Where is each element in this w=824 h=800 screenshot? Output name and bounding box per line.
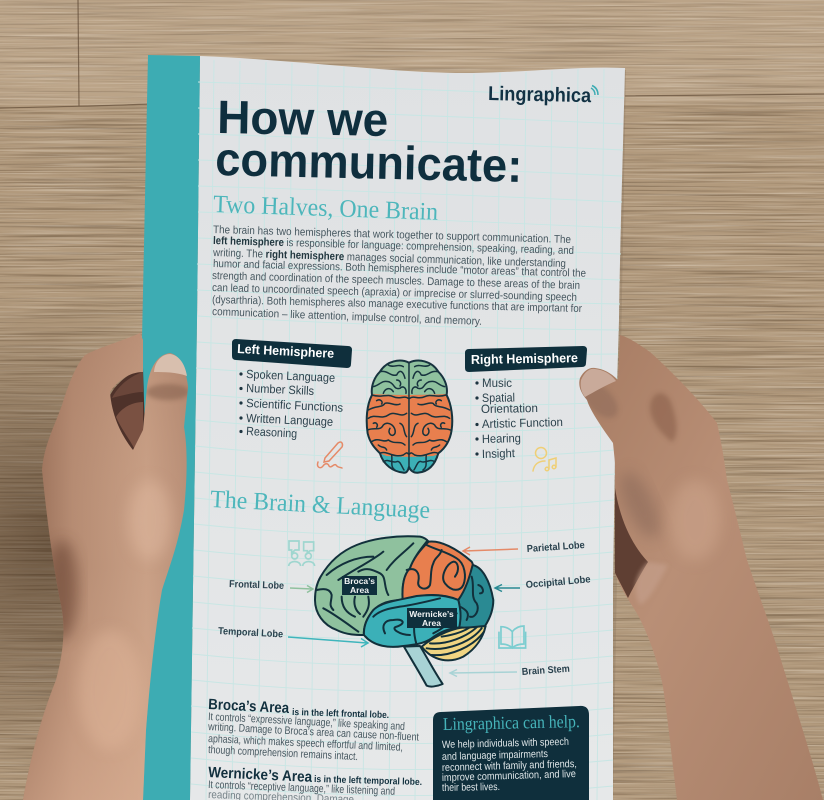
right thumbnail — [581, 369, 616, 397]
callout: Temporal Lobe: Temporal Lobe — [218, 626, 284, 640]
panel: Lingraphica can help — [433, 706, 589, 800]
label box: Broca's Area: Area — [350, 585, 369, 595]
intro text block: humor and facial expressions. Both hemispheres include “motor areas” that control the — [213, 258, 586, 280]
right hemisphere list: Insight — [482, 446, 516, 461]
left hemisphere list: Written Language — [246, 411, 334, 429]
right hand — [576, 335, 823, 800]
intro text block — [212, 224, 586, 328]
left hemisphere pill: Left Hemisphere — [237, 341, 334, 361]
cerebellum — [422, 626, 486, 660]
intro text block: The brain has two hemispheres that work together to support communication. The — [213, 224, 571, 246]
intro text block: can lead to uncoordinated speech (apraxia) or imprecise or slurred-sounding speech — [212, 282, 577, 304]
right hemisphere list: Artistic Function — [482, 415, 563, 431]
text: Broca's Area: writing. Damage to Broca’s area can cause non-fluent — [207, 721, 419, 744]
panel: left hemisphere — [232, 339, 352, 441]
panel: Lingraphica can help: reconnect with family and friends, — [442, 758, 577, 774]
icon: pen writing — [318, 442, 342, 468]
icon: open book — [499, 626, 526, 648]
side view brain diagram — [315, 536, 493, 687]
text: Broca's Area: Broca’s Area — [208, 696, 290, 717]
left hemisphere list: Scientific Functions — [246, 396, 343, 415]
text: Broca's Area: though comprehension remains intact. — [208, 744, 358, 763]
frontal lobe — [315, 536, 429, 635]
text: Broca's Area: aphasia, which makes speech effortful and limited, — [208, 733, 403, 754]
right hemisphere list — [475, 376, 563, 461]
brain top view — [366, 360, 454, 474]
paper — [142, 55, 626, 800]
label box: Broca's Area — [342, 576, 377, 595]
icon: person with music notes — [533, 448, 556, 471]
intro text block: writing. The right hemisphere manages social communication, like understanding — [212, 247, 566, 270]
text: Wernicke's Area — [208, 764, 422, 800]
text: Broca's Area: is in the left frontal lobe. — [292, 707, 389, 721]
occipital lobe — [458, 565, 493, 628]
left hand shading — [46, 384, 190, 750]
intro text block: communication – like attention, impulse control, and memory. — [212, 306, 482, 328]
panel: Lingraphica can help: improve communication, and live — [442, 768, 576, 784]
text: Wernicke's Area: It controls “receptive language,” like listening and — [208, 779, 395, 798]
text: Wernicke's Area: Wernicke’s Area — [208, 764, 313, 786]
text: Broca's Area — [207, 696, 419, 763]
callout: Frontal Lobe: Frontal Lobe — [229, 579, 285, 592]
callout: Temporal Lobe — [218, 626, 368, 647]
icon: people talking — [289, 541, 315, 566]
label box: Wernicke's Area: Wernicke’s — [409, 609, 454, 619]
left hand — [23, 333, 190, 800]
label box: Broca's Area: Broca’s — [344, 576, 375, 586]
right hemisphere list: Music — [482, 376, 512, 390]
intro text block: strength and coordination of the speech muscles. Damage to these areas of the brain — [212, 270, 580, 292]
title: How we — [217, 90, 389, 146]
callout: Occipital Lobe: Occipital Lobe — [525, 574, 591, 591]
label box: Wernicke's Area: Area — [422, 618, 441, 628]
logo: Lingraphica: Lingraphica — [488, 83, 592, 107]
right hemisphere list: Hearing — [482, 431, 521, 446]
callout: Parietal Lobe — [463, 540, 585, 555]
right hemisphere pill: Right Hemisphere — [471, 350, 578, 367]
callout: Parietal Lobe: Parietal Lobe — [526, 540, 585, 555]
text: Broca's Area: It controls “expressive language,” like speaking and — [208, 711, 405, 733]
label box: Wernicke's Area — [407, 608, 457, 628]
callout: Brain Stem — [450, 664, 570, 678]
left hemisphere list: Spoken Language — [246, 367, 336, 385]
panel: Lingraphica can help: We help individuals with speech — [442, 736, 569, 751]
left thumbnail — [154, 354, 187, 376]
teal spine — [142, 55, 200, 800]
heading: The Brain & Language: The Brain & Language — [210, 486, 431, 524]
callout: Occipital Lobe — [495, 574, 591, 592]
panel: Lingraphica can help: and language impairments — [442, 748, 548, 763]
intro text block: (dysarthria). Both hemispheres also manage executive functions that are important for — [212, 294, 582, 315]
panel: Lingraphica can help: Lingraphica can help. — [443, 711, 580, 734]
right hand shading — [582, 388, 718, 603]
brain stem — [404, 646, 443, 687]
title: communicate: — [215, 132, 523, 192]
temporal lobe — [364, 595, 461, 647]
panel: Lingraphica can help: their best lives. — [442, 781, 500, 794]
title — [215, 90, 523, 192]
callout: Brain Stem: Brain Stem — [521, 664, 570, 678]
left hemisphere list: Reasoning — [246, 424, 298, 441]
right hemisphere list: Spatial — [482, 390, 515, 405]
parietal lobe — [402, 541, 473, 600]
text: Wernicke's Area: is in the left temporal lobe. — [314, 774, 422, 788]
panel: right hemisphere — [465, 346, 587, 461]
intro text block: left hemisphere is responsible for language: comprehension, speaking, reading, and — [213, 235, 574, 257]
left hemisphere list — [239, 367, 343, 441]
heading: Two Halves, One Brain: Two Halves, One Brain — [213, 191, 439, 226]
left hemisphere list: Number Skills — [246, 381, 314, 398]
right hemisphere list: Orientation — [481, 401, 538, 416]
